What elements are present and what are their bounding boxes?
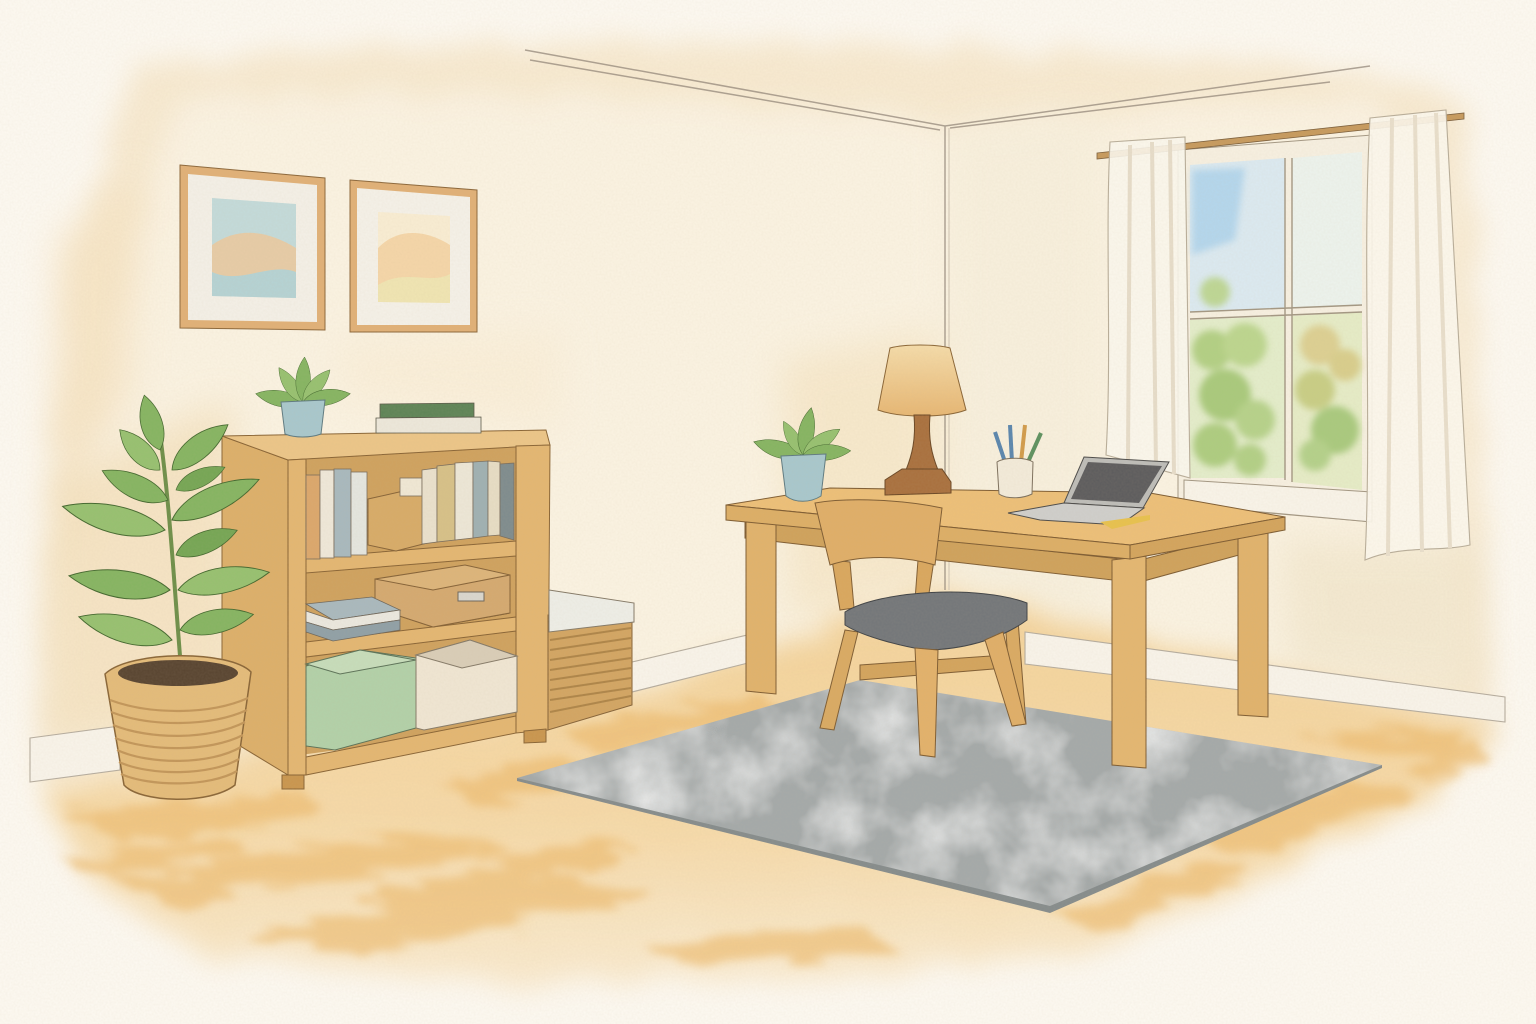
- curtain: right: [1365, 110, 1470, 560]
- curtain rod: [1097, 113, 1464, 159]
- desk top: [726, 488, 1285, 545]
- lamp shade: [878, 345, 966, 416]
- baseboards: [30, 632, 1505, 782]
- lamp base: [906, 415, 938, 470]
- window: [1178, 135, 1372, 522]
- beige storage box: [416, 640, 517, 730]
- chair front legs: [915, 648, 938, 757]
- wicker basket pot: [105, 656, 251, 799]
- shelf back: [300, 445, 525, 755]
- cardboard box with handle: [375, 565, 510, 627]
- framed picture: right: [350, 180, 477, 332]
- books: upper right: [400, 461, 514, 544]
- books on shelf top: [376, 403, 481, 433]
- pencil cup: [995, 425, 1041, 498]
- shelf top: [222, 430, 550, 460]
- plant on desk: [751, 406, 851, 501]
- chair back legs: [1005, 620, 1026, 726]
- bookshelf: [222, 430, 550, 789]
- books: upper left: [306, 469, 367, 559]
- left wall shading: [45, 110, 1480, 745]
- chair seat: [845, 592, 1027, 650]
- shelf feet: [282, 729, 546, 789]
- ceiling and corner lines: [525, 50, 1370, 590]
- desk: [726, 488, 1285, 768]
- chair back: [815, 500, 942, 565]
- wicker box on shelf: [368, 490, 435, 551]
- plant on shelf: [254, 357, 352, 437]
- desk legs: [746, 520, 776, 694]
- chair: [815, 500, 1027, 757]
- chair stretchers: [860, 655, 1005, 680]
- lidded wicker basket: [548, 590, 634, 730]
- floor brush streaks: [60, 695, 1490, 968]
- wall wash: [40, 42, 1490, 790]
- shelf boards: [288, 445, 550, 775]
- floor wash: [40, 592, 1490, 985]
- curtain: left: [1106, 137, 1190, 478]
- rug: [517, 680, 1382, 913]
- green storage box: [306, 650, 416, 750]
- desk lamp: [878, 345, 966, 495]
- framed picture: left: [180, 165, 325, 330]
- plant stem: [158, 420, 182, 680]
- plant leaves: [59, 392, 272, 654]
- chair posts: [832, 560, 854, 610]
- laptop: [1008, 457, 1169, 529]
- stacked books: [306, 597, 400, 641]
- floor plant: [59, 392, 272, 799]
- shelf side panel: [222, 436, 288, 775]
- desk apron: [745, 518, 1130, 582]
